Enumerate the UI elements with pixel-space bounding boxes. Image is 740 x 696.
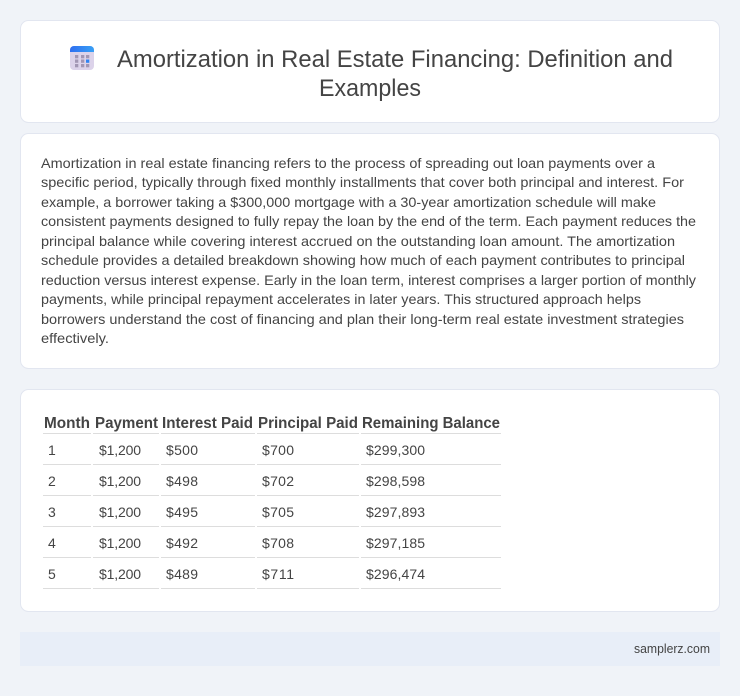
table header: Month (44, 415, 90, 432)
table row: month 3 (48, 504, 425, 520)
table header: Principal Paid (258, 415, 358, 432)
text block: description paragraph (41, 155, 696, 346)
table row: month 3: $705 (262, 504, 294, 520)
table row: month 1: $500 (166, 442, 198, 458)
table row: month 3: 3 (48, 504, 56, 520)
table row: month 1: $299,300 (366, 442, 425, 458)
title: Amortization in Real Estate Financing: Definition and (117, 46, 673, 73)
table row: month 5: 5 (48, 566, 56, 582)
text block: description paragraph: example, a borrower taking a $300,000 mortgage with a 30-year amortization schedule will make (41, 194, 656, 210)
table rules (43, 433, 501, 589)
table row: month 1: $1,200 (99, 442, 141, 458)
footer (20, 632, 720, 666)
table row: month 1: 1 (48, 442, 56, 458)
table row: month 2: 2 (48, 473, 56, 489)
text block: description paragraph: consistent payments designed to fully repay the loan by the end of the term. Each payment reduces the (41, 213, 696, 229)
icon: calendar (70, 46, 94, 70)
table row: month 4: $708 (262, 535, 294, 551)
panel: amortization table (20, 390, 720, 612)
text block: description paragraph: schedule provides a detailed breakdown showing how much of each payment contributes to principal (41, 252, 685, 268)
text block: description paragraph: reduction versus interest expense. Early in the loan term, interest comprises a larger portion of monthly (41, 272, 696, 288)
text block: description paragraph: effectively. (41, 330, 109, 346)
table row: month 4: $297,185 (366, 535, 425, 551)
table row: month 2: $498 (166, 473, 198, 489)
table row: month 3: $1,200 (99, 504, 141, 520)
text block: description paragraph: Amortization in real estate financing refers to the process of spreading out loan payments over a (41, 155, 655, 171)
table header (44, 415, 500, 432)
table row: month 4 (48, 535, 425, 551)
footer credit: samplerz.com (634, 642, 710, 656)
table row: month 2: $298,598 (366, 473, 425, 489)
table row: month 5 (48, 566, 425, 582)
table row: month 3: $297,893 (366, 504, 425, 520)
table row: month 5: $489 (166, 566, 198, 582)
panel: title card (20, 20, 720, 122)
table row: month 2 (48, 473, 425, 489)
table row: month 1 (48, 442, 425, 458)
panel: description (20, 134, 720, 368)
title (117, 46, 673, 102)
table header: Payment (95, 415, 159, 432)
table row: month 5: $1,200 (99, 566, 141, 582)
title: Examples (319, 75, 421, 102)
table row: month 2: $702 (262, 473, 294, 489)
table row: month 2: $1,200 (99, 473, 141, 489)
text block: description paragraph: specific period, typically through fixed monthly installments that cover both principal and interest. For (41, 174, 684, 190)
table row: month 4: $492 (166, 535, 198, 551)
table row: month 4: $1,200 (99, 535, 141, 551)
table row: month 3: $495 (166, 504, 198, 520)
table row: month 5: $711 (262, 566, 294, 582)
table header: Remaining Balance (362, 415, 500, 432)
text block: description paragraph: payments, while principal repayment accelerates in later years. This structured approach helps (41, 291, 641, 307)
table header: Interest Paid (162, 415, 253, 432)
text block: description paragraph: borrowers understand the cost of financing and plan their long-term real estate investment strategies (41, 311, 684, 327)
table row: month 4: 4 (48, 535, 56, 551)
table row: month 5: $296,474 (366, 566, 425, 582)
text block: description paragraph: principal balance while covering interest accrued on the outstanding loan amount. The amortization (41, 233, 675, 249)
table row: month 1: $700 (262, 442, 294, 458)
